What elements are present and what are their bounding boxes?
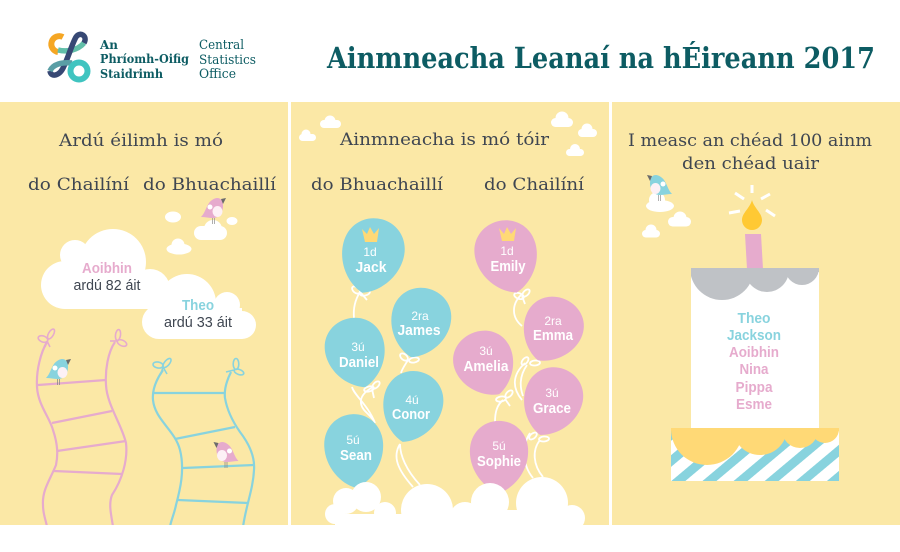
heading: I measc an chéad 100 ainm <box>628 131 872 151</box>
logo text: Irish: Phríomh-Oifig <box>100 52 190 66</box>
balloon: Jack: Jack <box>356 260 387 276</box>
icon: pink bird on blue ladder <box>214 442 238 468</box>
clouds at base of balloons <box>325 477 585 536</box>
cloud: Aoibhin <box>41 229 170 309</box>
balloon: Sophie <box>470 421 528 493</box>
balloon: Amelia: 3ú <box>479 344 493 358</box>
sky clouds <box>299 112 597 156</box>
balloon: Daniel: 3ú <box>351 340 365 354</box>
small clouds <box>642 192 691 238</box>
logo text: English <box>199 38 256 82</box>
names list: Jackson <box>727 328 781 344</box>
balloon: Conor <box>374 364 450 450</box>
balloon: Emily: Emily <box>490 259 526 275</box>
names list: Aoibhin <box>729 345 779 361</box>
names list: Esme <box>736 397 772 413</box>
names list: Theo <box>738 311 771 327</box>
icon: pink bird on cloud <box>201 198 226 224</box>
balloon: Grace: 3ú <box>545 386 559 400</box>
cloud: Theo <box>142 274 256 339</box>
balloon: James: James <box>398 323 440 339</box>
icon: blue bird on pink ladder <box>46 359 71 385</box>
balloon: Amelia <box>444 321 526 407</box>
balloon: Emma: 2ra <box>544 314 562 328</box>
ladder: pink <box>37 328 128 527</box>
names list: Nina <box>740 362 769 378</box>
balloon: Jack: 1d <box>363 245 377 259</box>
balloon: Sophie: 5ú <box>492 439 506 453</box>
balloon: James: 2ra <box>411 309 429 323</box>
logo text: Irish: Staidrimh <box>100 67 163 81</box>
icon: blue bird on cloud <box>647 175 672 201</box>
heading line 2: den chéad uair <box>682 154 820 174</box>
balloon: Grace <box>513 359 591 445</box>
logo text: English: Central <box>199 38 244 53</box>
balloon: Emily <box>468 213 546 301</box>
balloon: Jack <box>332 211 412 301</box>
panel: new names <box>612 102 900 525</box>
subheading: boys: do Bhuachaillí <box>311 175 444 195</box>
heading: Ainmneacha is mó tóir <box>339 130 550 150</box>
icon: crown <box>362 227 379 242</box>
cloud: Aoibhin: Aoibhin <box>82 261 132 277</box>
icon: crown <box>499 227 516 241</box>
cloud: Aoibhin: ardú 82 áit <box>74 278 140 294</box>
icon: candle <box>729 185 775 269</box>
logo text: English: Office <box>199 67 236 82</box>
balloon: Sean: Sean <box>340 448 372 464</box>
logo mark <box>50 34 88 80</box>
balloon: Sean <box>323 413 385 489</box>
balloon: James <box>382 281 458 365</box>
names list: Pippa <box>736 380 773 396</box>
balloon: Daniel <box>318 311 394 395</box>
balloon strings <box>351 285 549 487</box>
balloon: Sean: 5ú <box>346 433 360 447</box>
cake <box>671 268 839 481</box>
balloon: Conor: 4ú <box>405 393 419 407</box>
logo text: English: Statistics <box>199 53 256 68</box>
balloon: Grace: Grace <box>533 401 571 417</box>
balloon: Emma <box>511 287 593 373</box>
subheading: girls: do Chailíní <box>28 175 130 195</box>
logo text: Irish: An <box>99 38 118 52</box>
balloon: Daniel: Daniel <box>339 355 379 371</box>
logo <box>50 34 256 82</box>
balloon: Amelia: Amelia <box>464 359 509 375</box>
subheading: boys: do Bhuachaillí <box>143 175 277 195</box>
logo text: Irish <box>99 38 190 81</box>
subheading: girls: do Chailíní <box>484 175 585 195</box>
names list <box>727 311 781 413</box>
ladder: blue <box>153 357 254 527</box>
balloon: Emily: 1d <box>500 244 514 258</box>
heading: Ardú éilimh is mó <box>58 131 223 151</box>
small clouds <box>165 212 238 254</box>
balloon: Conor: Conor <box>392 407 430 423</box>
panel: biggest climbers <box>0 102 288 527</box>
balloon: Emma: Emma <box>533 328 574 344</box>
balloon: Sophie: Sophie <box>477 454 521 470</box>
cloud: Theo: ardú 33 áit <box>164 315 232 331</box>
cloud: Theo: Theo <box>182 298 214 314</box>
panel: top names <box>291 102 609 536</box>
